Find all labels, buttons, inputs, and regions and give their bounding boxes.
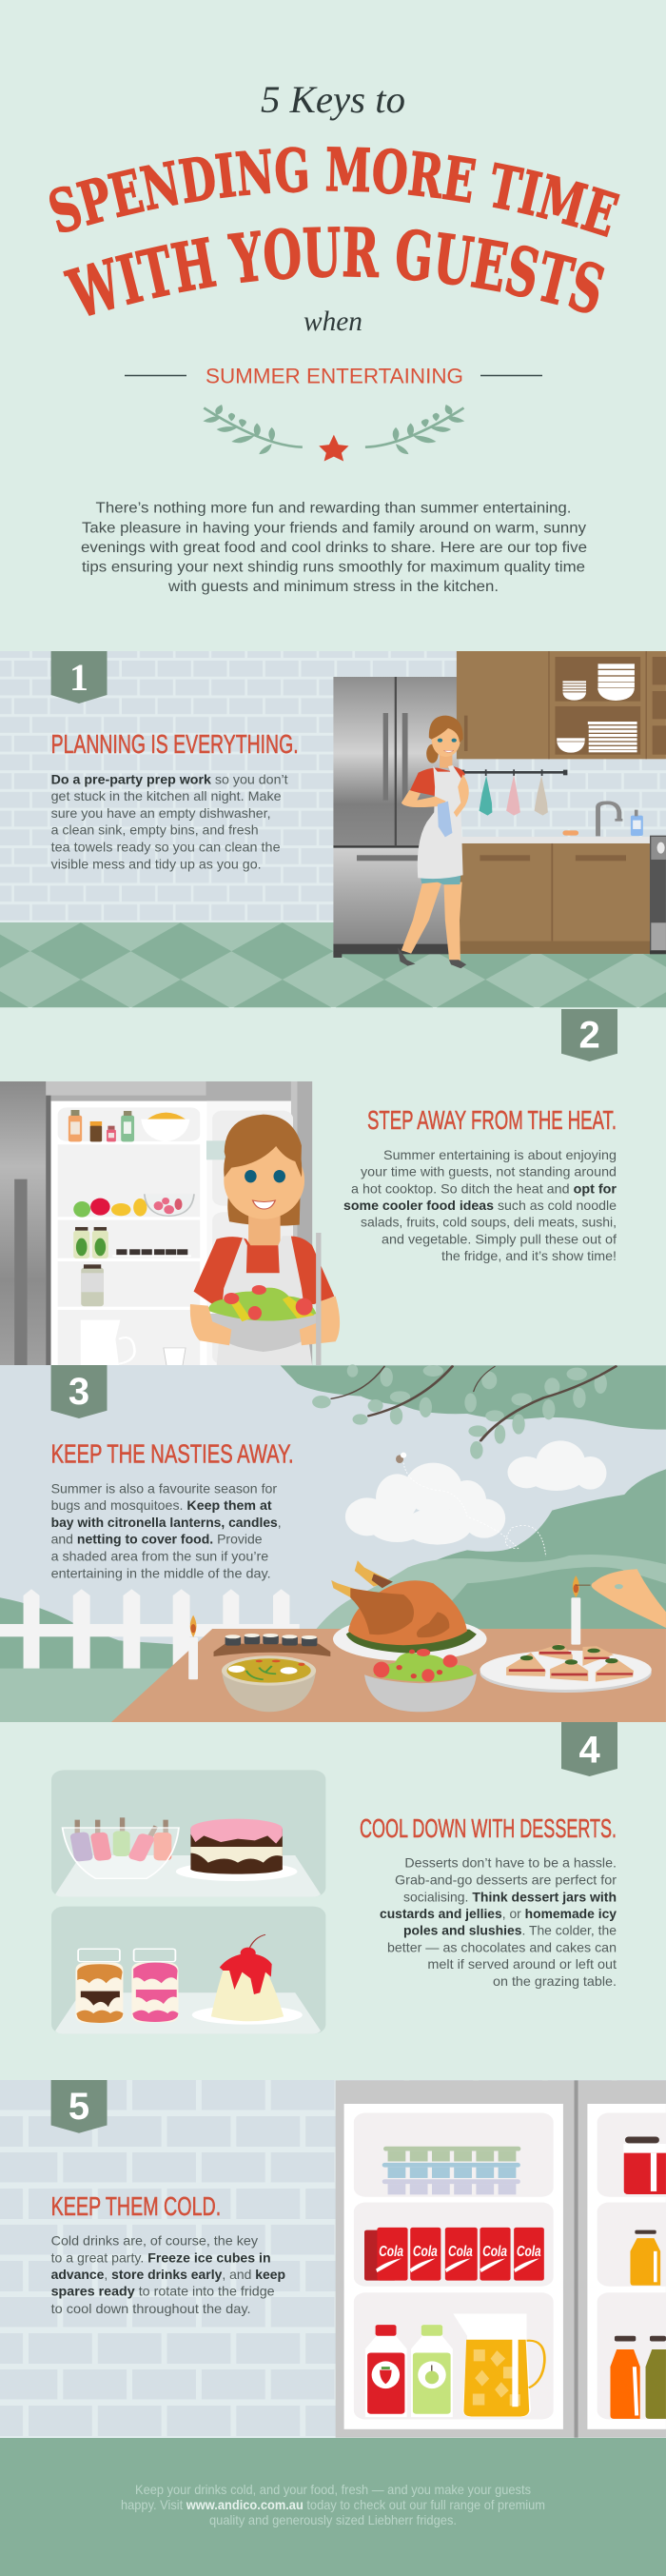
fridge shelves [58,1107,200,1365]
jug and glass [81,1320,186,1365]
body text 1: tea towels ready so you can clean the [51,839,281,854]
body text 3: Summer is also a favourite season for [51,1480,277,1496]
heading 3: KEEP THE NASTIES AWAY. [51,1439,294,1469]
badge 1 [51,651,107,703]
top shelf [51,1770,325,1897]
badge 4: 4 [578,1730,600,1772]
table [111,1629,666,1722]
body text 4: Grab-and-go desserts are perfect for [395,1872,617,1887]
lower cabinets [459,837,650,954]
intro paragraph [81,501,587,595]
footer band [0,2438,666,2576]
brick wall [0,2080,666,2438]
body text 3: entertaining in the middle of the day. [51,1565,271,1580]
cola cans: Cola [413,2242,438,2259]
dessert jars [75,1949,178,2023]
fridge illustration [336,2080,666,2438]
subtitle: summer entertaining: SUMMER ENTERTAINING [206,364,463,388]
body text 2: a hot cooktop. So ditch the heat and opt for [351,1180,617,1196]
body text 4: melt if served around or left out [427,1956,617,1972]
oven [650,836,666,954]
clouds [345,1440,606,1545]
body text 5: spares ready to rotate into the fridge [51,2284,275,2299]
body text 3: and netting to cover food. Provide [51,1532,263,1547]
woman holding salad bowl [190,1115,340,1365]
bottom shelf [51,1907,325,2034]
body text 4: better — as chocolates and cakes can [387,1939,617,1954]
body text 2 [343,1147,617,1263]
juice bottles and jug [365,2313,544,2417]
upper cabinets [457,651,666,759]
body text 4: on the grazing table. [493,1973,617,1989]
badge 5: 5 [69,2086,89,2128]
fruit and berry bowl [73,1194,194,1218]
body text 2: your time with guests, not standing around [361,1164,617,1179]
hills [0,1469,666,1722]
panel 2: step away from the heat [0,1009,617,1365]
sink, sponge and soap [562,803,643,836]
intro paragraph: with guests and minimum stress in the kitchen. [167,579,499,595]
badge 4 [561,1722,617,1776]
body text 2: and vegetable. Simply pull these out of [382,1231,617,1246]
jelly pudding [192,1934,303,2025]
intro paragraph: evenings with great food and cool drinks to share. Here are our top five [81,540,587,556]
badge 2 [561,1009,617,1061]
bowl of icy poles [63,1817,179,1878]
body text 3: bugs and mosquitoes. Keep them at [51,1497,272,1513]
body text 4 [380,1855,617,1989]
body text 4: socialising. Think dessert jars with [403,1889,617,1904]
tree foliage [281,1364,666,1459]
body text 1: visible mess and tidy up as you go. [51,856,262,871]
sushi board [214,1634,330,1656]
body text 2: Summer entertaining is about enjoying [383,1147,617,1162]
body text 1 [51,771,288,871]
fridge [333,677,459,958]
panel 1: planning [0,651,666,1007]
cola cans [364,2228,544,2281]
body text 4: poles and slushies. The colder, the [403,1923,617,1938]
brick wall [0,651,666,922]
cola cans: Cola [379,2242,403,2259]
cola cans: Cola [448,2242,473,2259]
candle left [188,1615,198,1679]
panel 4: cool down with desserts [51,1722,617,2034]
badge 3: 3 [69,1371,89,1413]
right door bottles [610,2137,666,2419]
open fridge illustration [0,1081,340,1365]
fridge shelves [354,2113,666,2420]
body text 1: a clean sink, empty bins, and fresh [51,822,259,838]
footer text [121,2482,545,2527]
soup bowl [222,1655,316,1712]
layer cake [176,1819,297,1881]
badge 2: 2 [578,1015,600,1057]
fly and dashed trail [396,1453,546,1556]
footer text: happy. Visit www.andico.com.au today to check out our full range of premium [121,2497,545,2512]
roast turkey [331,1560,487,1661]
jar [81,1264,104,1306]
salad bowl [364,1649,477,1712]
badge 1: 1 [69,656,88,699]
main title line 1: SPENDING MORE TIME [49,147,620,238]
body text 3: bay with citronella lanterns, candles, [51,1515,282,1530]
pickle jars and desserts [73,1227,191,1258]
body text 1: get stuck in the kitchen all night. Make [51,788,282,803]
body text 2: the fridge, and it’s show time! [441,1248,617,1263]
badge 3 [51,1365,107,1418]
subtitle rules [125,375,542,377]
panel 5: keep them cold [0,2080,666,2438]
cola cans: Cola [482,2242,507,2259]
body text 1: Do a pre-party prep work so you don’t [51,771,288,786]
fridge body [0,1081,312,1365]
fridge body [336,2080,666,2438]
ice cube trays [382,2147,520,2194]
body text 5 [51,2233,285,2316]
script line: when: when [304,306,362,337]
footer text: Keep your drinks cold, and your food, fresh — and you make your guests [135,2482,531,2497]
badge 5 [51,2080,107,2133]
body text 3: a shaded area from the sun if you’re [51,1548,268,1563]
main title line 2: WITH YOUR GUESTS [63,227,605,316]
tree branches [331,1366,616,1440]
intro paragraph: tips ensuring your next shindig runs smoothly for maximum quality time [82,560,585,576]
body text 5: Cold drinks are, of course, the key [51,2233,258,2249]
intro paragraph: There’s nothing more fun and rewarding than summer entertaining. [95,501,571,517]
stacked plates and bowls [557,664,637,753]
body text 4: Desserts don’t have to be a hassle. [404,1855,617,1871]
candle right and hand lighting it [571,1569,666,1645]
body text 5: advance, store drinks early, and keep [51,2267,285,2282]
body text 3 [51,1480,282,1580]
heading 5: KEEP THEM COLD. [51,2191,221,2221]
wreath and star [203,405,464,461]
body text 2: salads, fruits, cold soups, deli meats, sushi, [361,1215,617,1230]
sandwich plate [480,1644,652,1693]
body text 1: sure you have an empty dishwasher, [51,805,271,821]
body text 4: custards and jellies, or homemade icy [380,1906,617,1921]
cola cans: Cola [517,2242,541,2259]
sky [0,1365,666,1722]
intro paragraph: Take pleasure in having your friends and family around on warm, sunny [82,520,586,537]
towel rail and towels [460,769,567,816]
body text 2: some cooler food ideas such as cold noodle [343,1198,617,1213]
woman in apron [398,716,469,968]
heading 1: PLANNING IS EVERYTHING. [51,729,299,759]
dessert shelves illustration [51,1770,325,2034]
script line: 5 Keys to: 5 Keys to [261,78,405,121]
kitchen illustration [333,651,666,968]
panel 3: keep the nasties away [0,1364,666,1722]
fence [0,1589,300,1669]
header: title block [49,78,620,461]
footer text: quality and generously sized Liebherr fridges. [209,2512,457,2527]
checker floor [0,922,666,1007]
body text 5: to cool down throughout the day. [51,2301,251,2316]
body text 5: to a great party. Freeze ice cubes in [51,2249,271,2265]
outdoor scene illustration [0,1364,666,1722]
bottles and bowl [69,1110,190,1141]
